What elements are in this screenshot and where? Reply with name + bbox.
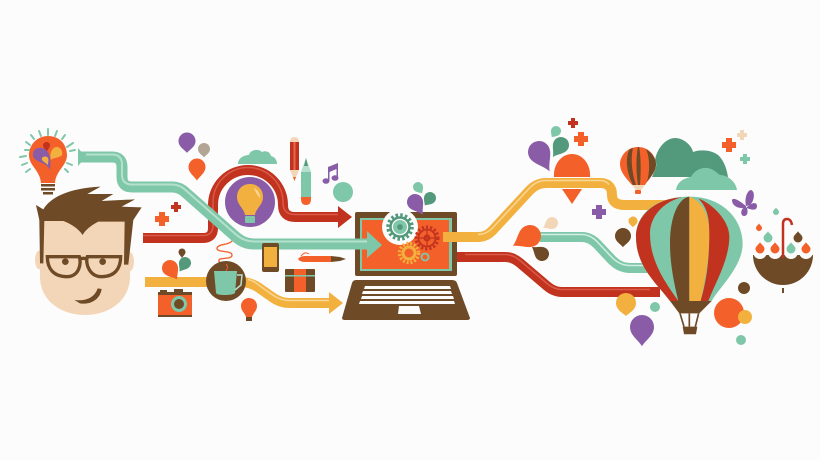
mint cloud over arc <box>238 150 277 164</box>
idea bulb with rays <box>20 129 75 194</box>
umbrella canopy <box>753 255 813 285</box>
face <box>40 220 130 315</box>
envelope <box>636 197 743 301</box>
butterfly <box>732 190 757 216</box>
decorative circles and drops below balloon <box>616 282 752 346</box>
right mint pipe <box>540 234 650 268</box>
keyboard rows <box>359 286 455 304</box>
yellow pipe to arrow <box>145 280 343 314</box>
cup <box>214 271 237 295</box>
mint circle <box>333 182 353 202</box>
umbrella stem <box>783 219 792 258</box>
drops top left <box>178 132 210 181</box>
music note <box>322 163 338 184</box>
camera lens <box>171 296 187 312</box>
ropes <box>680 313 699 327</box>
mint gear in white circle <box>382 209 418 245</box>
big orange drop behind pipe <box>554 154 590 204</box>
red pipe with arc to arrow <box>143 168 352 238</box>
mint pencil <box>301 158 311 205</box>
big hot air balloon <box>636 197 743 334</box>
bulb glass <box>29 136 67 183</box>
red pencil <box>290 137 299 181</box>
glasses <box>47 257 121 277</box>
cup handle <box>235 275 242 290</box>
collar <box>670 301 712 313</box>
right top drops <box>524 124 572 177</box>
red gear <box>416 227 438 249</box>
plus signs left <box>155 202 181 226</box>
brown stripe <box>670 197 689 301</box>
right red stripe <box>698 198 729 301</box>
fountain pen <box>298 253 346 262</box>
brown and yellow drops near balloon <box>615 216 638 247</box>
yellow bulb <box>237 184 263 215</box>
left red stripe <box>636 197 682 301</box>
laptop <box>342 212 470 320</box>
canopy scallops <box>753 245 813 259</box>
right plus signs cluster <box>722 130 750 164</box>
small hot air balloon <box>620 147 656 194</box>
bulb socket <box>245 216 255 223</box>
umbrella with drops <box>753 208 813 293</box>
ears <box>35 251 134 271</box>
right plus signs <box>568 118 606 219</box>
bulb colour petals <box>33 142 62 170</box>
coffee steam <box>217 238 233 266</box>
laptop screen <box>355 212 457 276</box>
smile <box>74 288 102 304</box>
eyes <box>62 258 106 265</box>
yellow stripe <box>689 197 709 301</box>
smartphone <box>262 243 279 272</box>
gift box <box>285 269 315 292</box>
coffee cup circle <box>206 261 246 301</box>
bulb highlight <box>254 188 260 198</box>
small orange bulb <box>241 298 257 321</box>
dark green cloud <box>652 138 728 177</box>
character face with glasses <box>35 187 142 315</box>
light mint cloud <box>676 168 737 190</box>
drops near camera <box>159 248 193 284</box>
steam inside <box>226 264 228 271</box>
laptop base <box>342 280 470 320</box>
bulb base <box>41 184 55 194</box>
small mint gear <box>422 254 428 260</box>
mint pipe from bulb to laptop with arrow <box>78 148 382 258</box>
trackpad <box>398 306 421 314</box>
drops above laptop <box>404 180 438 219</box>
right part of yellow and red pipe over screen <box>443 237 465 257</box>
yellow gear <box>400 244 418 262</box>
drops at mint pipe start <box>507 215 560 264</box>
hair <box>36 187 142 265</box>
right yellow pipe <box>443 180 665 237</box>
purple circle with lightbulb <box>225 177 275 227</box>
camera <box>158 289 192 317</box>
basket <box>683 327 697 334</box>
falling drops <box>756 208 810 254</box>
bulb rays <box>20 129 75 172</box>
right red pipe <box>457 254 660 292</box>
canopy tip <box>782 288 784 293</box>
